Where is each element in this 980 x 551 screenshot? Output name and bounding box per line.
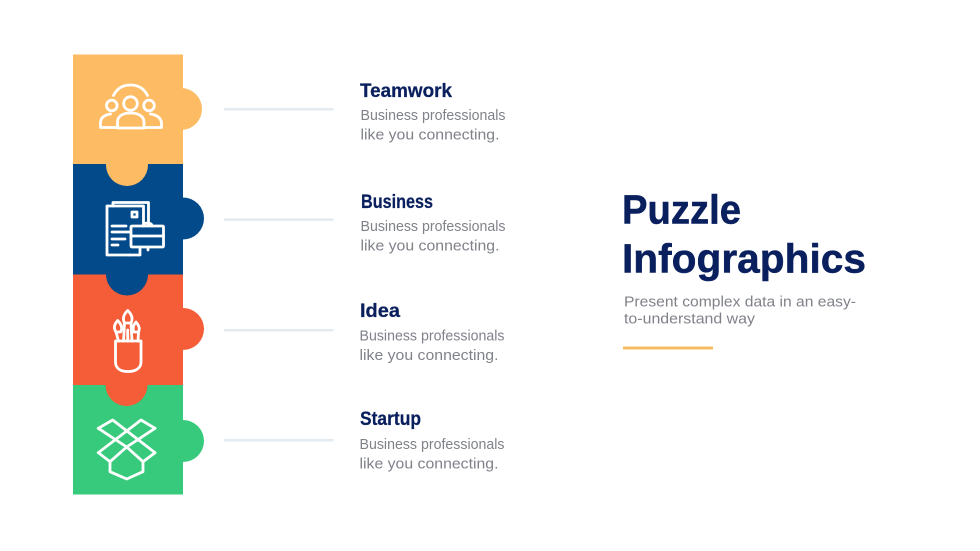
title — [622, 186, 866, 282]
text block: Startup: like you connecting. — [360, 456, 498, 472]
text block: Startup: Startup — [360, 409, 421, 430]
text block: Teamwork: like you connecting. — [360, 126, 500, 144]
text block: Teamwork: Business professionals — [360, 107, 506, 124]
connector line 4 — [224, 439, 334, 442]
text block: Idea: Idea — [360, 301, 400, 322]
text block: Business: Business — [361, 192, 433, 213]
text block: Teamwork — [360, 81, 506, 144]
text block: Teamwork: Teamwork — [360, 81, 452, 102]
icon: brushes in cup — [115, 310, 141, 372]
text block: Idea: like you connecting. — [360, 347, 498, 364]
connector line 1 — [224, 108, 334, 110]
connector line 2 — [224, 218, 334, 221]
subtitle: Present complex data in an easy- — [624, 294, 856, 310]
text block: Business: like you connecting. — [360, 238, 500, 254]
puzzle piece: green — [73, 385, 204, 494]
title: Puzzle — [622, 186, 741, 232]
puzzle piece: red — [73, 274, 204, 406]
title: Infographics — [622, 236, 866, 282]
connector line 3 — [224, 329, 334, 332]
icon: document and briefcase — [107, 202, 164, 255]
puzzle piece: blue — [73, 164, 204, 296]
puzzle piece: orange — [73, 54, 202, 186]
puzzle column — [73, 54, 204, 494]
text block: Business — [360, 192, 506, 254]
subtitle: to-understand way — [624, 310, 756, 328]
icon: team — [100, 85, 162, 128]
text block: Idea: Business professionals — [360, 328, 504, 344]
text block: Startup — [360, 409, 504, 472]
text block: Startup: Business professionals — [360, 436, 504, 453]
text block: Idea — [360, 301, 504, 364]
text block: Business: Business professionals — [360, 218, 506, 235]
accent line — [623, 346, 713, 350]
icon: open box — [98, 420, 155, 479]
subtitle — [624, 294, 856, 328]
